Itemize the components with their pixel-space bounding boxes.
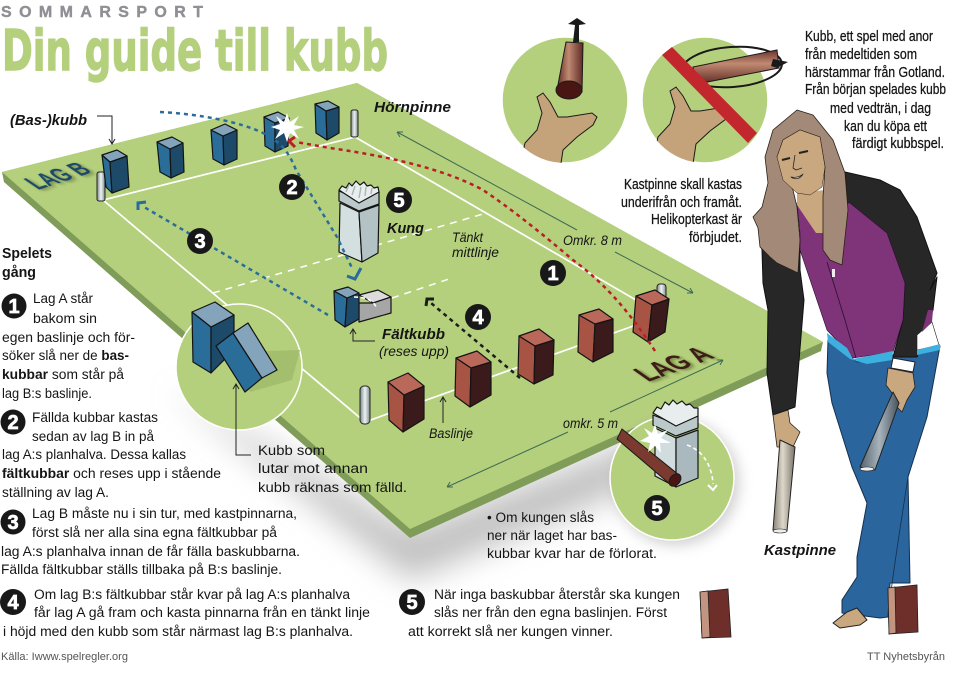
step 2: 2 [7, 412, 19, 434]
white shirt [917, 322, 939, 350]
cyan waistband [827, 333, 893, 364]
blue base kubbs [102, 101, 339, 193]
step 5: 5 [406, 592, 418, 614]
label: leaning kubb: lutar mot annan [258, 461, 368, 477]
credit: TT Nyhetsbyrån [867, 651, 945, 663]
step 5: slås ner från den egna baslinjen. Först [434, 605, 667, 621]
left stick [773, 440, 795, 531]
arrow 3: blue dashed throw [138, 202, 328, 315]
team label: LAG A: LAG A [626, 342, 721, 386]
label: leaning kubb: kubb räknas som fälld. [258, 480, 407, 496]
text: history of kubb [805, 29, 946, 152]
corner pin: left B [97, 172, 105, 201]
field badge 5: 5 [393, 190, 405, 212]
arrow: throw direction [568, 18, 586, 42]
label: Hörnpinne: Hörnpinne [374, 99, 451, 116]
label: Tänkt mittlinje: Tänkt [452, 230, 484, 245]
field badge 3 [187, 228, 213, 254]
fältkubb white dashed arrow [354, 297, 377, 309]
field badge 2: 2 [286, 177, 298, 199]
step 3: lag A:s planhalva innan de får fälla baskubbarna. [1, 544, 300, 560]
label: Baslinje: Baslinje [429, 426, 473, 441]
field badge 1: 1 [547, 263, 559, 285]
foot [833, 608, 867, 628]
step 3: Lag B måste nu i sin tur, med kastpinnarna, [32, 506, 297, 522]
purple top [797, 203, 905, 358]
note: king knocked down early [487, 510, 657, 562]
badge 5 in circle [644, 495, 670, 521]
label: Tänkt mittlinje [452, 230, 499, 260]
text: history of kubb: färdigt kubbspel. [852, 136, 944, 152]
measure: omkr. 5 m [447, 360, 723, 487]
step 2: fältkubbar och reses upp i stående [2, 466, 221, 482]
black sweater [845, 172, 937, 357]
field badge 4 [465, 304, 491, 330]
field badge 2 [279, 174, 305, 200]
red base kubbs [388, 290, 669, 432]
jeans [827, 340, 940, 618]
text: history of kubb: Kubb, ett spel med anor [805, 29, 933, 45]
circle: leaning kubb [176, 302, 302, 430]
corner pin: right B [351, 110, 358, 137]
step 4: i höjd med den kubb som står närmast lag B:s planhalva. [3, 624, 353, 640]
kubb at the foot [888, 585, 918, 634]
face [777, 130, 825, 195]
step 5: När inga baskubbar återstår ska kungen [434, 587, 680, 603]
kubb bottom [700, 589, 731, 638]
circle shadow: king [613, 419, 739, 545]
heading: Spelets gång [2, 245, 52, 281]
step 2: ställning av lag A. [2, 485, 109, 501]
corner pin: A front [360, 386, 370, 424]
hair [753, 110, 848, 273]
measure: omkr. 5 m: omkr. 5 m [563, 416, 618, 431]
arrow 1: red dashed throw [289, 137, 655, 351]
text: throwing rule: Kastpinne skall kastas [624, 177, 742, 193]
label: Fältkubb: Fältkubb [382, 326, 445, 343]
field badge 4: 4 [472, 307, 484, 329]
cuff [891, 358, 915, 372]
step 4 [0, 587, 370, 640]
king [339, 181, 379, 262]
right stick [860, 392, 899, 470]
text: throwing rule: underifrån och framåt. [621, 195, 742, 211]
text: history of kubb: kan du köpa ett [844, 119, 927, 135]
step 3: först slå ner alla sina egna fältkubbar på [32, 525, 277, 541]
measure: Omkr. 8 m: Omkr. 8 m [563, 233, 622, 248]
label: Kastpinne: Kastpinne [764, 542, 836, 559]
note: king knocked down early: ner när laget har bas- [487, 528, 617, 544]
left hand [773, 410, 800, 447]
step 3 [0, 506, 300, 578]
label: leaning kubb [258, 443, 407, 496]
step 1: bakom sin [33, 311, 97, 327]
field shadow [165, 385, 640, 580]
circle: hit king [610, 400, 734, 540]
label: Fältkubb [350, 326, 449, 359]
label: Tänkt mittlinje: mittlinje [452, 245, 499, 260]
field badge 1 [540, 260, 566, 286]
step 1: 1 [8, 296, 20, 318]
step 1: söker slå ner de bas- [2, 348, 129, 364]
badge 5 in circle: 5 [651, 498, 663, 520]
text: history of kubb: härstammar från Gotland. [805, 65, 945, 81]
person: girl with throwing sticks [753, 110, 940, 628]
circle: correct underhand throw [502, 37, 628, 170]
court lines [103, 137, 636, 422]
heading: Spelets gång: gång [2, 264, 36, 281]
step 2 [0, 410, 221, 501]
step 4: 4 [7, 592, 19, 614]
team label: LAG B: LAG B [18, 158, 99, 194]
label: (Bas-)kubb [10, 112, 115, 144]
text: history of kubb: med vedträn, i dag [830, 101, 931, 117]
title kicker: SOMMARSPORT [1, 4, 203, 21]
step 4: Om lag B:s fältkubbar står kvar på lag A:s planhalva [34, 587, 350, 603]
text: throwing rule: förbjudet. [689, 230, 742, 246]
step 2: Fällda kubbar kastas [32, 410, 158, 426]
circle: forbidden helicopter throw [642, 37, 788, 164]
step 1: egen baslinje och för- [2, 330, 135, 346]
label: leaning kubb: Kubb som [258, 443, 325, 459]
step 5 [399, 587, 680, 640]
label: Fältkubb: (reses upp) [379, 344, 449, 359]
label: (Bas-)kubb: (Bas-)kubb [10, 112, 87, 129]
right hand [886, 368, 915, 412]
title: Din guide till kubb [2, 19, 388, 84]
field badge 5 [386, 187, 412, 213]
label: Baslinje [429, 397, 473, 441]
step 1: lag B:s baslinje. [2, 386, 92, 402]
step 4: får lag A gå fram och kasta pinnarna från en tänkt linje [34, 605, 370, 621]
corner pin: A back [657, 284, 666, 300]
step 1: Lag A står [33, 291, 93, 307]
label: Kung: Kung [387, 220, 424, 237]
step 1: kubbar som står på [2, 367, 124, 383]
text: history of kubb: från medeltiden som [805, 47, 917, 63]
arrow 4: black dashed throw [426, 299, 520, 378]
step 2: lag A:s planhalva. Dessa kallas [2, 447, 186, 463]
step 5: att korrekt slå ner kungen vinner. [408, 624, 613, 640]
note: king knocked down early: • Om kungen slås [487, 510, 594, 526]
text: throwing rule [621, 177, 742, 246]
measure: Omkr. 8 m [397, 132, 693, 293]
arrow 2: blue dashed throw [160, 112, 361, 279]
pointer: leaning kubb [233, 384, 251, 455]
playing field [2, 83, 823, 538]
note: king knocked down early: kubbar kvar har de förlorat. [487, 546, 657, 562]
step 1 [2, 291, 135, 402]
neck and chest [797, 190, 825, 233]
impact star [271, 113, 304, 142]
text: throwing rule: Helikopterkast är [651, 212, 742, 228]
step 2: sedan av lag B in på [32, 429, 154, 445]
step 3: Fällda fältkubbar ställs tillbaka på B:s baslinje. [1, 562, 282, 578]
field badge 3: 3 [194, 231, 206, 253]
step 3: 3 [7, 512, 19, 534]
heading: Spelets gång: Spelets [2, 245, 52, 262]
source: Källa: Iwww.spelregler.org [1, 651, 128, 663]
fältkubb: raised and fallen [334, 287, 391, 327]
